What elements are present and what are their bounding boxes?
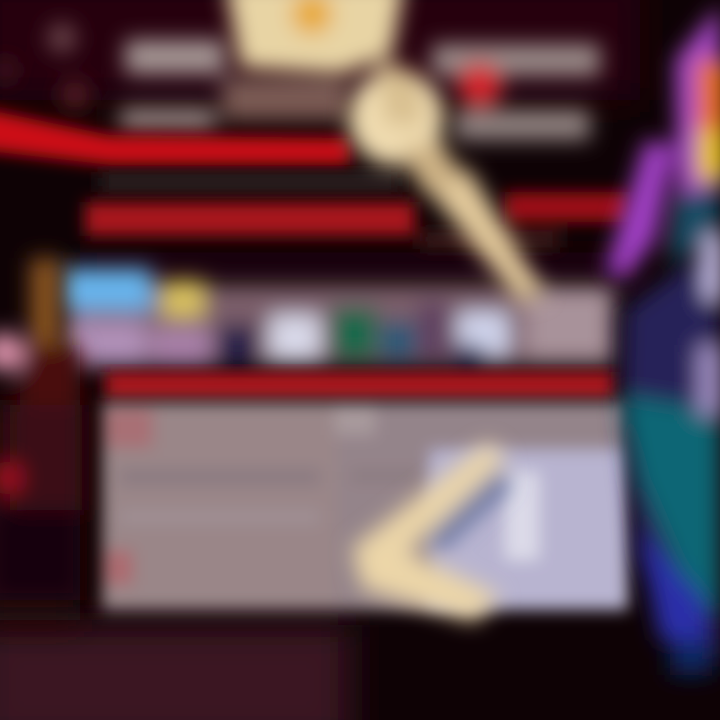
character left: [0, 258, 82, 600]
heading text band: [0, 23, 600, 140]
cream arrow upper: [225, 0, 545, 302]
red banner lower: [85, 192, 630, 248]
table panel: [102, 402, 628, 610]
red banner upper: [0, 108, 350, 165]
red table header: [105, 372, 615, 398]
cream arrow lower: [352, 442, 512, 622]
dark stripe: [100, 172, 400, 192]
icon row panel: [62, 268, 615, 367]
character right: [605, 5, 720, 675]
